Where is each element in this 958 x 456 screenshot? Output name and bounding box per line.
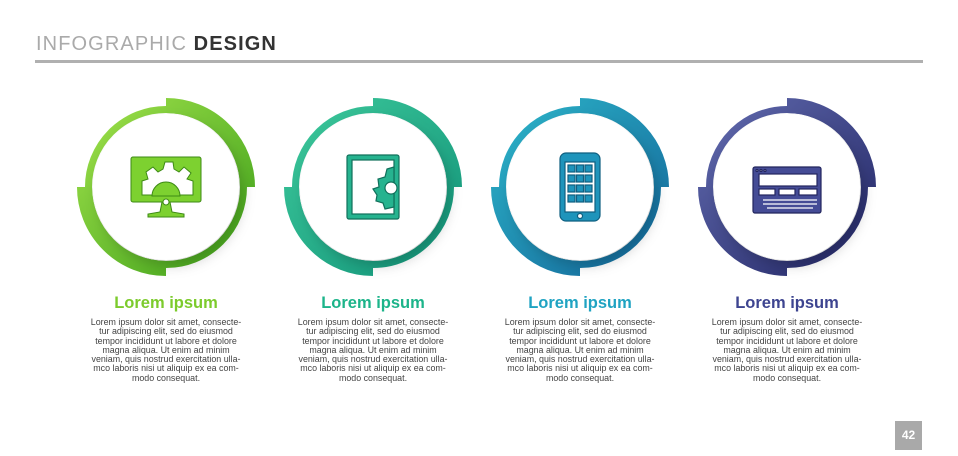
text block 2 xyxy=(298,294,448,383)
text block 4: Lorem ipsum dolor sit amet, consecte- xyxy=(712,317,862,327)
circle 1 xyxy=(84,106,248,268)
text block 1: tempor incididunt ut labore et dolore xyxy=(95,336,237,346)
icon: monitor gear xyxy=(131,157,201,217)
text block 3: modo consequat. xyxy=(546,373,614,383)
icon: browser window xyxy=(753,167,821,213)
text block 1: Lorem ipsum xyxy=(114,294,218,312)
title: INFOGRAPHIC DESIGN xyxy=(36,33,277,55)
circle 4 xyxy=(706,106,868,268)
text block 1: tur adipiscing elit, sed do eiusmod xyxy=(99,326,233,336)
text block 4: veniam, quis nostrud exercitation ulla- xyxy=(712,354,861,364)
text block 3: Lorem ipsum xyxy=(528,294,632,312)
text block 1: magna aliqua. Ut enim ad minim xyxy=(102,345,230,355)
circle 3 xyxy=(498,106,662,268)
text block 4: Lorem ipsum xyxy=(735,294,839,312)
text block 2: modo consequat. xyxy=(339,373,407,383)
text block 3: tempor incididunt ut labore et dolore xyxy=(509,336,651,346)
text block 4: modo consequat. xyxy=(753,373,821,383)
text block 2: magna aliqua. Ut enim ad minim xyxy=(309,345,437,355)
text block 1: Lorem ipsum dolor sit amet, consecte- xyxy=(91,317,241,327)
text block 3: magna aliqua. Ut enim ad minim xyxy=(516,345,644,355)
text block 1: veniam, quis nostrud exercitation ulla- xyxy=(92,354,240,364)
text block 4: tempor incididunt ut labore et dolore xyxy=(716,336,858,346)
text block 4 xyxy=(712,294,862,383)
text block 2: Lorem ipsum xyxy=(321,294,425,312)
text block 2: tur adipiscing elit, sed do eiusmod xyxy=(306,326,440,336)
text block 2: veniam, quis nostrud exercitation ulla- xyxy=(298,354,447,364)
text block 3: mco laboris nisi ut aliquip ex ea com- xyxy=(507,363,653,373)
text block 1: mco laboris nisi ut aliquip ex ea com- xyxy=(93,363,239,373)
text block 3 xyxy=(505,294,655,383)
text block 1 xyxy=(91,294,241,383)
circle 2 xyxy=(292,106,454,268)
icon: book gear xyxy=(347,155,399,219)
text block 3: veniam, quis nostrud exercitation ulla- xyxy=(506,354,654,364)
text block 4: magna aliqua. Ut enim ad minim xyxy=(723,345,851,355)
text block 2: Lorem ipsum dolor sit amet, consecte- xyxy=(298,317,448,327)
text block 3: tur adipiscing elit, sed do eiusmod xyxy=(513,326,647,336)
page number xyxy=(895,421,922,450)
page number: 42 xyxy=(902,428,915,442)
text block 4: mco laboris nisi ut aliquip ex ea com- xyxy=(714,363,860,373)
text block 3: Lorem ipsum dolor sit amet, consecte- xyxy=(505,317,655,327)
icon: mobile phone xyxy=(560,153,600,221)
text block 2: mco laboris nisi ut aliquip ex ea com- xyxy=(300,363,446,373)
text block 4: tur adipiscing elit, sed do eiusmod xyxy=(720,326,854,336)
text block 2: tempor incididunt ut labore et dolore xyxy=(302,336,444,346)
text block 1: modo consequat. xyxy=(132,373,200,383)
